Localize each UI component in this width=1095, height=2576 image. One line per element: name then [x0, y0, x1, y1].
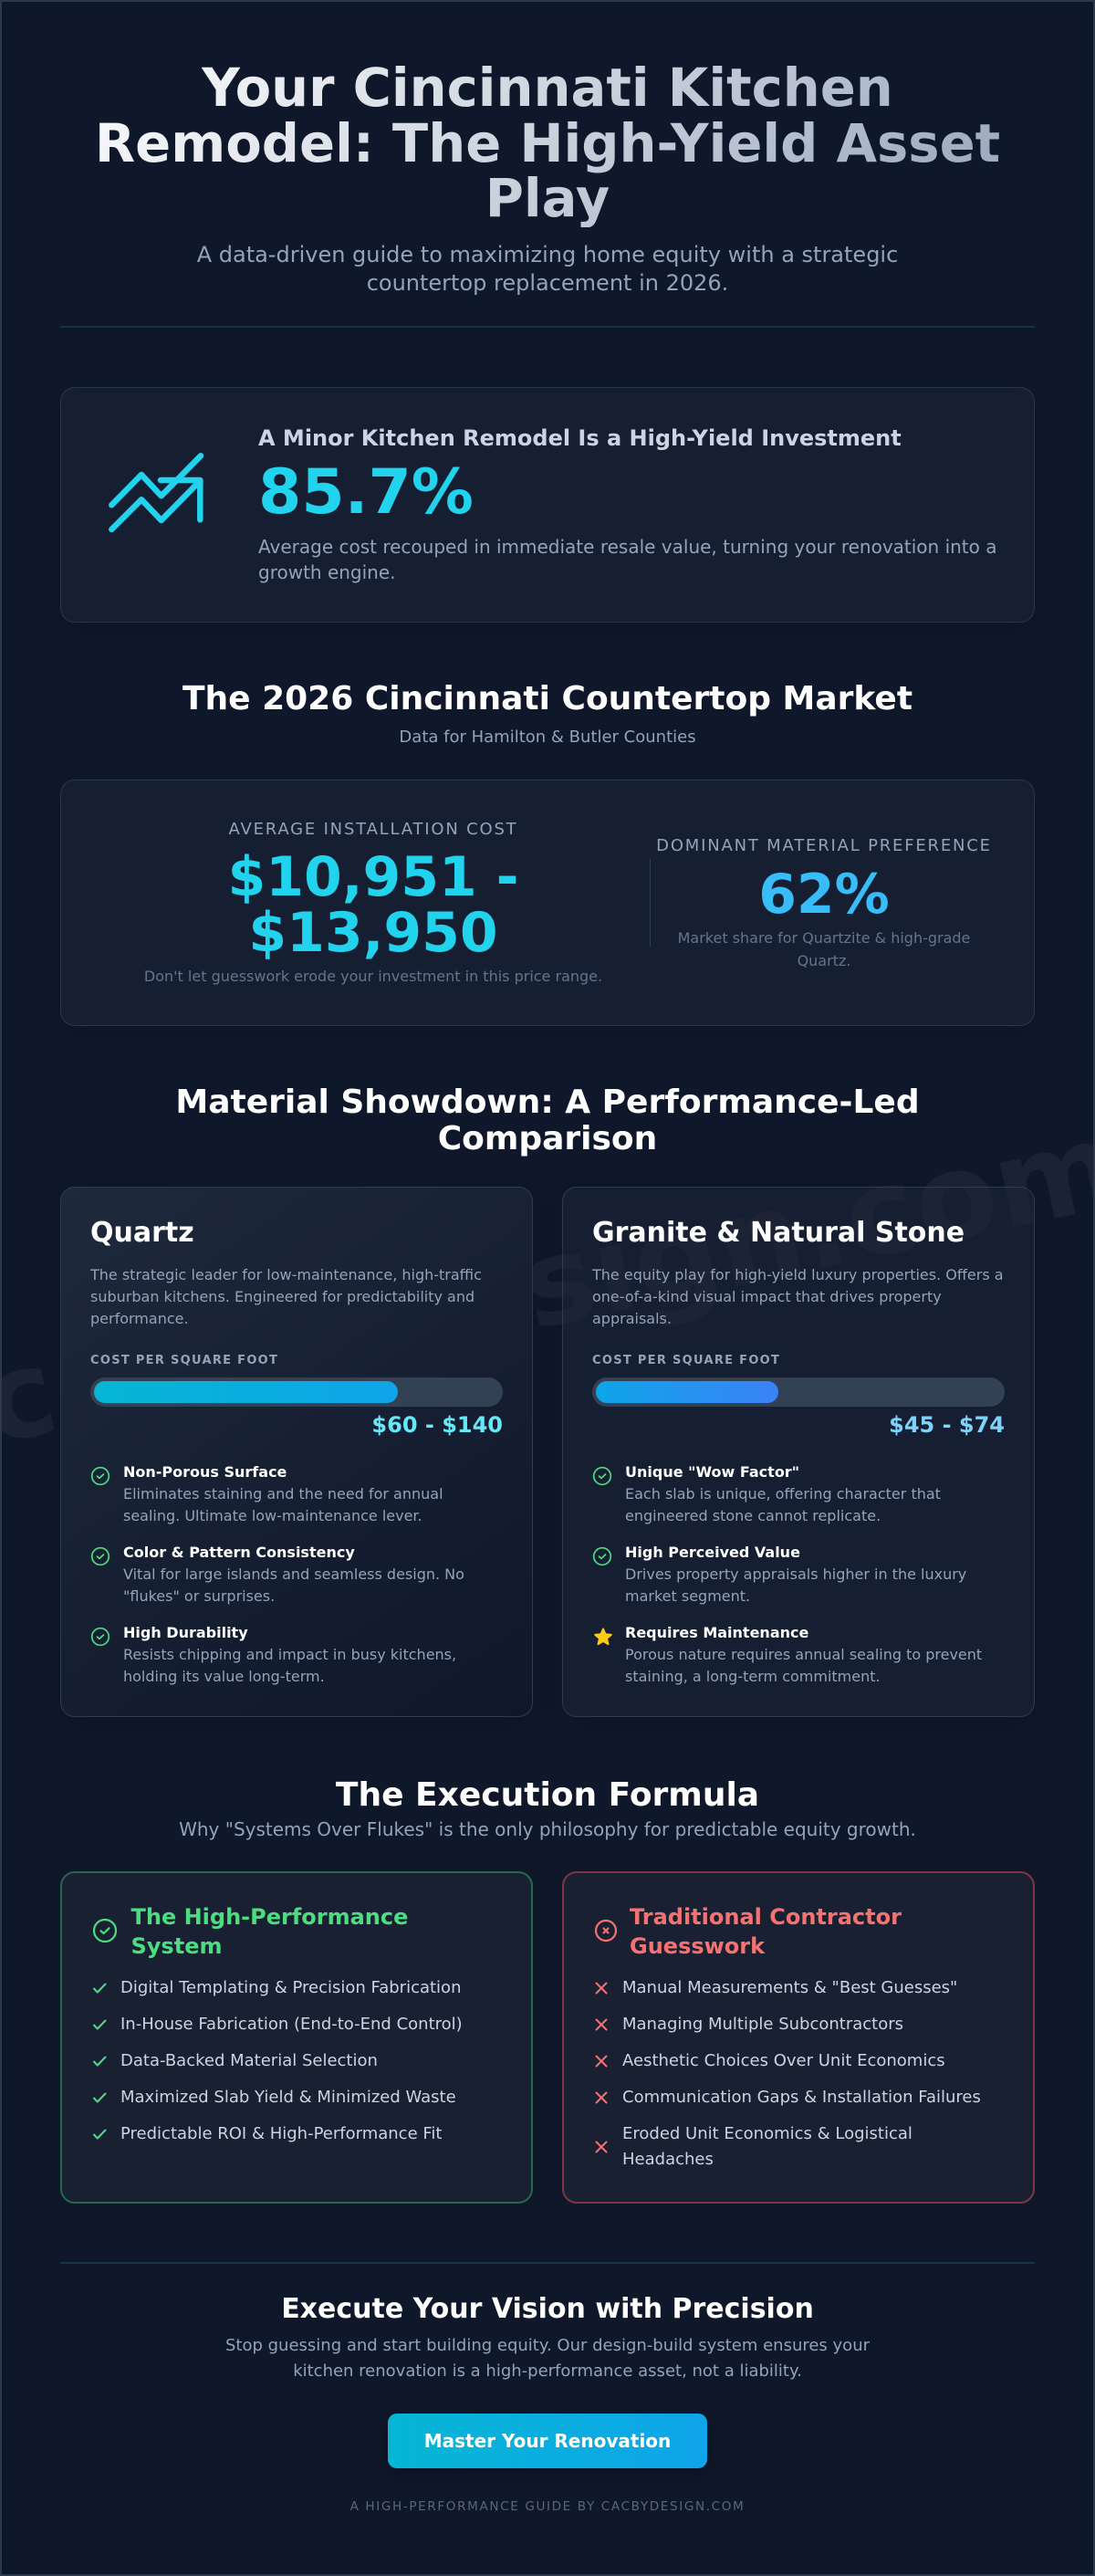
- feature: maintenance: Porous nature requires annual sealing to prevent: [625, 1646, 982, 1663]
- item: Eroded Unit Economics & Logistical: [622, 2124, 912, 2143]
- feature: wow factor: Each slab is unique, offering character that: [625, 1485, 941, 1503]
- footer: A HIGH-PERFORMANCE GUIDE BY CACBYDESIGN.COM: [350, 2499, 745, 2514]
- icon: trending chart: [109, 453, 204, 533]
- stat: average cost: $10,951 -: [227, 845, 519, 909]
- item: Data-Backed Material Selection: [120, 2051, 378, 2070]
- feature: consistency: Color & Pattern Consistency: [123, 1544, 355, 1561]
- stat: material preference: Market share for Quartzite & high-grade: [678, 929, 970, 947]
- feature: maintenance: staining, a long-term commitment.: [625, 1668, 881, 1685]
- item: Digital Templating & Precision Fabrication: [120, 1978, 461, 1997]
- item: Communication Gaps & Installation Failures: [622, 2088, 981, 2107]
- feature: non-porous: sealing. Ultimate low-maintenance lever.: [123, 1507, 422, 1524]
- panel title: Traditional Contractor: [630, 1904, 902, 1930]
- feature: non-porous: Non-Porous Surface: [123, 1463, 287, 1481]
- feature: perceived value: [593, 1544, 966, 1605]
- panel: market stats: [60, 780, 1035, 1026]
- stat: material preference: [656, 836, 992, 969]
- big number: 85.7%: [258, 456, 474, 529]
- panel title: [131, 1904, 408, 1959]
- panel: quartz: [60, 1187, 533, 1717]
- description: [89, 1266, 482, 1327]
- heading: market: The 2026 Cincinnati Countertop Market: [182, 680, 912, 717]
- call to action text: Stop guessing and start building equity. Our design-build system ensures your: [225, 2336, 870, 2355]
- cost bar: [592, 1377, 1005, 1407]
- button: Master Your Renovation: [424, 2430, 671, 2452]
- icon: x circle: [595, 1919, 617, 1942]
- price: $60 - $140: [371, 1412, 503, 1438]
- feature: maintenance: [594, 1624, 982, 1685]
- bar label: COST PER SQUARE FOOT: [90, 1354, 278, 1367]
- panel: high-performance system: [60, 1871, 533, 2204]
- item: Aesthetic Choices Over Unit Economics: [622, 2051, 945, 2070]
- subheading: execution formula: Why "Systems Over Flukes" is the only philosophy for predictable equity growth.: [179, 1818, 916, 1840]
- feature: durability: Resists chipping and impact in busy kitchens,: [123, 1646, 456, 1663]
- feature: wow factor: [593, 1463, 941, 1524]
- heading: A Minor Kitchen Remodel Is a High-Yield Investment: [258, 425, 902, 451]
- feature: consistency: Vital for large islands and seamless design. No: [123, 1565, 464, 1583]
- feature: consistency: "flukes" or surprises.: [123, 1587, 275, 1605]
- cost bar: [90, 1377, 503, 1407]
- subtitle: [197, 242, 898, 296]
- feature: maintenance: Requires Maintenance: [625, 1624, 808, 1641]
- stat: material preference: DOMINANT MATERIAL PREFERENCE: [656, 836, 992, 855]
- item: [595, 2124, 912, 2169]
- feature: perceived value: Drives property appraisals higher in the luxury: [625, 1565, 966, 1583]
- heading: material showdown: [175, 1084, 920, 1157]
- description: Average cost recouped in immediate resale value, turning your renovation into a: [258, 535, 997, 557]
- description: The equity play for high-yield luxury properties. Offers a: [592, 1266, 1004, 1283]
- feature: non-porous: Eliminates staining and the need for annual: [123, 1485, 443, 1503]
- subtitle: countertop replacement in 2026.: [367, 270, 728, 296]
- feature: wow factor: engineered stone cannot replicate.: [625, 1507, 881, 1524]
- title: [60, 61, 1035, 226]
- feature: wow factor: Unique "Wow Factor": [625, 1463, 799, 1481]
- item: Predictable ROI & High-Performance Fit: [120, 2124, 442, 2143]
- description: growth engine.: [258, 560, 396, 582]
- material name: Quartz: [90, 1217, 194, 1249]
- title: Remodel: The High-Yield Asset: [95, 113, 1000, 173]
- description: performance.: [90, 1310, 189, 1327]
- button: [388, 2414, 707, 2468]
- feature: durability: High Durability: [123, 1624, 248, 1641]
- description: suburban kitchens. Engineered for predictability and: [90, 1288, 474, 1305]
- heading: material showdown: Comparison: [438, 1120, 657, 1157]
- feature: non-porous: [91, 1463, 443, 1524]
- item: Manual Measurements & "Best Guesses": [622, 1978, 957, 1997]
- item: Headaches: [622, 2150, 714, 2169]
- subtitle: A data-driven guide to maximizing home equity with a strategic: [197, 242, 898, 267]
- bar label: COST PER SQUARE FOOT: [592, 1354, 780, 1367]
- description: The strategic leader for low-maintenance, high-traffic: [90, 1266, 482, 1283]
- item: In-House Fabrication (End-to-End Control): [120, 2015, 463, 2034]
- feature: durability: holding its value long-term.: [123, 1668, 325, 1685]
- panel: resale stat: [60, 387, 1035, 623]
- description: one-of-a-kind visual impact that drives property: [592, 1288, 942, 1305]
- stat: average cost: [144, 820, 602, 985]
- stat: average cost: AVERAGE INSTALLATION COST: [228, 820, 517, 839]
- item: Managing Multiple Subcontractors: [622, 2015, 903, 2034]
- icon: check circle: [93, 1919, 117, 1942]
- subheading: market: Data for Hamilton & Butler Counties: [399, 728, 696, 747]
- feature: durability: [91, 1624, 456, 1685]
- stat: material preference: 62%: [758, 863, 890, 927]
- description: [591, 1266, 1004, 1327]
- heading: material showdown: Material Showdown: A Performance-Led: [175, 1084, 920, 1121]
- feature: perceived value: market segment.: [625, 1587, 750, 1605]
- item: Maximized Slab Yield & Minimized Waste: [120, 2088, 456, 2107]
- panel: granite: [562, 1187, 1035, 1717]
- panel title: The High-Performance: [131, 1904, 408, 1930]
- panel title: Guesswork: [630, 1933, 765, 1959]
- description: [258, 535, 997, 582]
- panel title: [630, 1904, 902, 1959]
- price: $45 - $74: [889, 1412, 1005, 1438]
- material name: Granite & Natural Stone: [592, 1217, 965, 1249]
- feature: perceived value: High Perceived Value: [625, 1544, 800, 1561]
- stat: material preference: Quartz.: [798, 951, 850, 969]
- title: Play: [485, 168, 610, 229]
- call to action text: [225, 2336, 870, 2381]
- call to action text: kitchen renovation is a high-performance asset, not a liability.: [293, 2361, 802, 2381]
- stat: average cost: $13,950: [248, 900, 498, 964]
- stat: average cost: Don't let guesswork erode your investment in this price range.: [144, 968, 602, 985]
- heading: execution formula: The Execution Formula: [336, 1776, 759, 1814]
- title: Your Cincinnati Kitchen: [202, 58, 893, 119]
- feature: consistency: [91, 1544, 464, 1605]
- panel: traditional guesswork: [562, 1871, 1035, 2204]
- heading: call to action: Execute Your Vision with Precision: [281, 2293, 814, 2325]
- description: appraisals.: [592, 1310, 672, 1327]
- panel title: System: [131, 1933, 222, 1959]
